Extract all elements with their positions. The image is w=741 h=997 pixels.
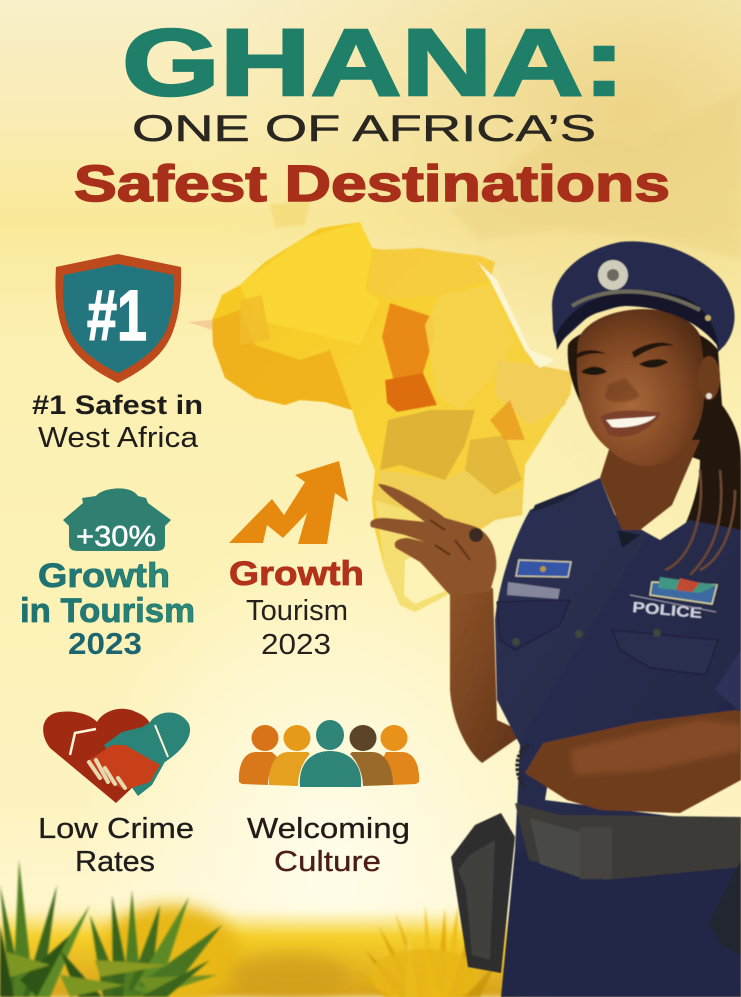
hat	[552, 241, 735, 352]
eyebrows	[577, 343, 674, 358]
shirt badges: POLICE	[632, 599, 703, 622]
shirt	[495, 478, 741, 870]
bracelet	[518, 745, 529, 788]
text: #1 safest: #1 Safest in	[32, 390, 203, 420]
left arm	[450, 588, 525, 763]
icon: rising arrow	[229, 461, 348, 544]
icon: people group	[239, 720, 419, 787]
hand pointing	[370, 484, 496, 595]
text: in tourism: in Tourism	[20, 592, 195, 630]
text: welcoming: Welcoming	[247, 813, 410, 845]
shirt badges	[507, 560, 717, 646]
text: tourism: Tourism	[246, 595, 348, 627]
stat: growth in tourism	[20, 488, 195, 661]
epaulette	[532, 482, 600, 512]
icon: shield	[55, 254, 181, 383]
text: West Africa: West Africa	[38, 422, 199, 454]
icon: heart handshake	[43, 709, 190, 803]
heading: GHANA: GHANA:	[122, 10, 625, 116]
stat: low crime	[38, 709, 194, 878]
stat: growth arrow	[229, 461, 364, 661]
text: rates: Rates	[75, 846, 155, 878]
eyes	[581, 359, 668, 375]
trousers	[501, 850, 741, 997]
subheading: ONE OF AFRICA’S	[132, 108, 596, 149]
equipment at right	[709, 860, 741, 955]
icon: house badge	[63, 488, 171, 553]
yellow grass clump	[355, 905, 495, 997]
face	[577, 309, 705, 466]
heading: safest destinations: Safest Destinations	[74, 155, 670, 212]
holster	[451, 813, 515, 973]
nose	[605, 378, 640, 402]
hair	[568, 323, 741, 572]
map of Africa	[188, 222, 573, 612]
text: low crime: Low Crime	[38, 813, 194, 845]
pocket flaps	[497, 600, 718, 675]
icon: shield: #1	[87, 277, 147, 356]
stat: safest in West Africa	[32, 254, 203, 454]
text: 2023: 2023	[68, 626, 142, 661]
crossed forearm	[525, 710, 741, 813]
stat: welcoming culture	[239, 720, 419, 878]
text: culture: Culture	[274, 846, 381, 878]
collar	[555, 478, 622, 548]
belt	[515, 803, 741, 880]
hair strands	[665, 470, 735, 575]
neck	[600, 440, 700, 530]
text: growth: Growth	[38, 557, 170, 595]
icon: house badge: +30%	[76, 521, 156, 553]
text: 2023: 2023	[261, 629, 331, 661]
title	[74, 10, 670, 212]
text: growth: Growth	[229, 555, 364, 593]
police officer	[370, 241, 741, 997]
green grass clumps	[0, 860, 222, 997]
mouth and smile	[600, 410, 661, 437]
ear	[698, 356, 720, 400]
ground and grass	[0, 860, 520, 997]
